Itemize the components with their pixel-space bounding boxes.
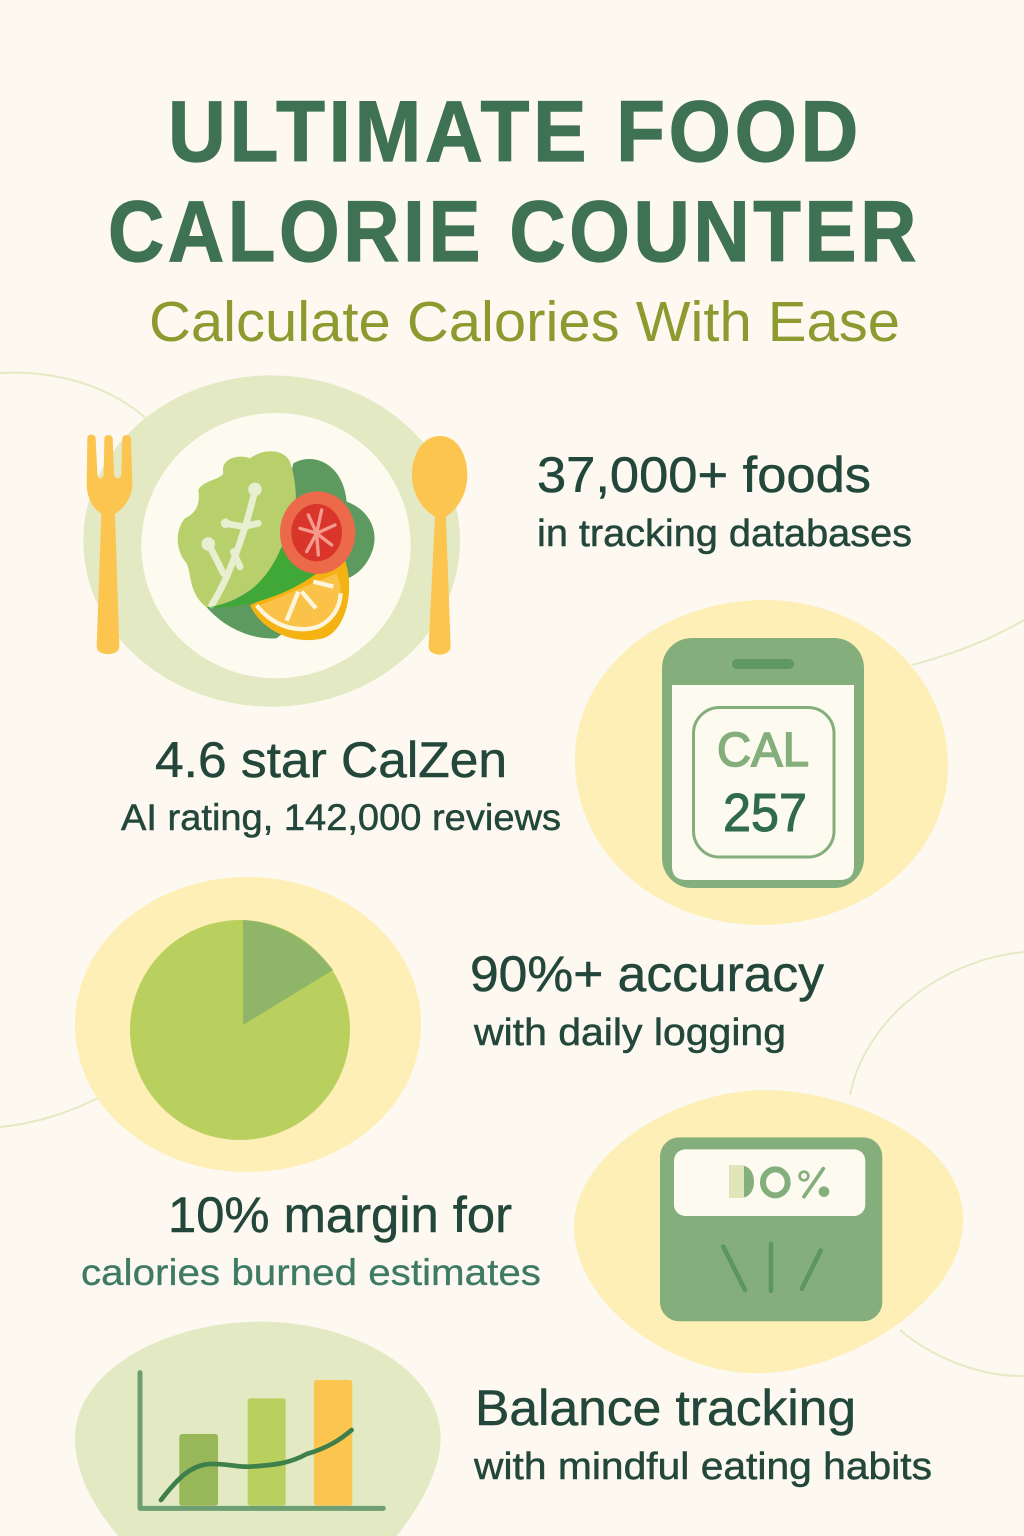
icon: scale [574,1090,963,1373]
icon: lemon slice [250,560,349,640]
icon: phone [575,600,948,925]
icon: spoon [412,436,467,655]
text: accuracy [470,946,824,1054]
text: foods [537,447,912,555]
text: balance: with mindful eating habits [473,1446,932,1488]
icon: phone: CAL [717,724,809,777]
icon: dark leaves [207,459,375,638]
text: rating [121,732,561,838]
text: margin: 10% margin for [168,1187,512,1243]
text: margin [81,1187,541,1293]
text: balance: Balance tracking [475,1380,856,1436]
icon: bar chart [75,1322,441,1536]
title: ULTIMATE FOOD [168,84,862,180]
icon: inner green leaf [207,547,317,608]
plate [83,375,460,707]
icon: fork [87,435,132,654]
subtitle: Calculate Calories With Ease [149,290,900,354]
title [108,84,920,280]
text: balance [473,1380,932,1488]
text: accuracy: with daily logging [473,1012,786,1054]
text: rating: 4.6 star CalZen [155,732,507,788]
text: foods: 37,000+ foods [537,447,871,503]
icon: salad plate with fork and spoon [83,375,467,707]
text: rating: AI rating, 142,000 reviews [121,797,561,838]
text: accuracy: 90%+ accuracy [470,946,824,1002]
icon: lettuce [178,451,296,607]
icon: pie chart [75,877,421,1172]
icon: lettuce stem [202,483,262,605]
title: CALORIE COUNTER [108,184,920,280]
text: margin: calories burned estimates [81,1252,541,1293]
icon: phone: 257 [723,783,807,843]
text: foods: in tracking databases [537,513,912,555]
icon: tomato [280,491,355,574]
